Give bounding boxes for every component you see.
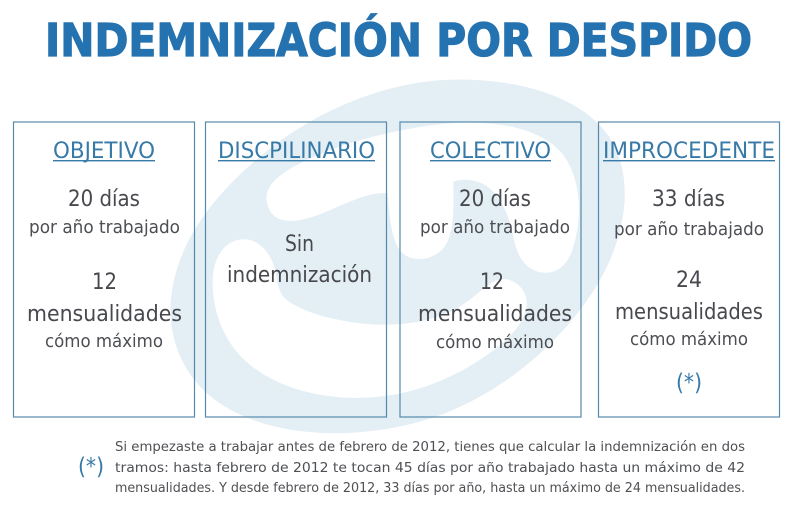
footnote text bbox=[115, 439, 745, 496]
text: mensualidades: mensualidades bbox=[418, 301, 572, 327]
footnote text: tramos: hasta febrero de 2012 te tocan 45 días por año trabajado hasta un máximo de 42 bbox=[115, 460, 745, 476]
heading: objetivo: OBJETIVO bbox=[53, 138, 155, 164]
panel: improcedente bbox=[598, 122, 780, 417]
text: cómo máximo: cómo máximo bbox=[630, 330, 748, 350]
panel: objetivo bbox=[14, 122, 194, 417]
panel: disciplinario bbox=[206, 122, 386, 417]
background watermark logo bbox=[170, 80, 625, 433]
heading: improcedente: IMPROCEDENTE bbox=[603, 138, 775, 164]
footnote text: mensualidades. Y desde febrero de 2012, 33 días por año, hasta un máximo de 24 mensualidades. bbox=[115, 480, 745, 496]
heading: discpilinario: DISCPILINARIO bbox=[218, 138, 375, 164]
text: 20 días: 20 días bbox=[68, 186, 140, 212]
title: INDEMNIZACIÓN POR DESPIDO bbox=[45, 14, 752, 67]
text: mensualidades: mensualidades bbox=[615, 299, 763, 325]
footnote text: Si empezaste a trabajar antes de febrero de 2012, tienes que calcular la indemnización en dos bbox=[115, 439, 745, 455]
text: 12: 12 bbox=[480, 269, 504, 295]
footnote asterisk: (*) bbox=[78, 454, 104, 480]
heading: colectivo: COLECTIVO bbox=[430, 138, 551, 164]
text: por año trabajado: por año trabajado bbox=[420, 218, 570, 238]
text: cómo máximo: cómo máximo bbox=[45, 332, 163, 352]
text: 33 días: 33 días bbox=[652, 186, 725, 212]
text: por año trabajado: por año trabajado bbox=[614, 220, 764, 240]
text: 24: 24 bbox=[676, 267, 702, 293]
text: 12: 12 bbox=[92, 269, 117, 295]
text: 20 días: 20 días bbox=[459, 186, 531, 212]
text: sin: Sin bbox=[285, 231, 314, 257]
text: asterisk mark: (*) bbox=[676, 370, 702, 396]
panel: colectivo bbox=[400, 122, 581, 417]
text: mensualidades: mensualidades bbox=[27, 301, 182, 327]
text: por año trabajado: por año trabajado bbox=[29, 218, 180, 238]
text: indemnización: indemnización bbox=[227, 262, 372, 288]
text: cómo máximo: cómo máximo bbox=[436, 333, 554, 353]
